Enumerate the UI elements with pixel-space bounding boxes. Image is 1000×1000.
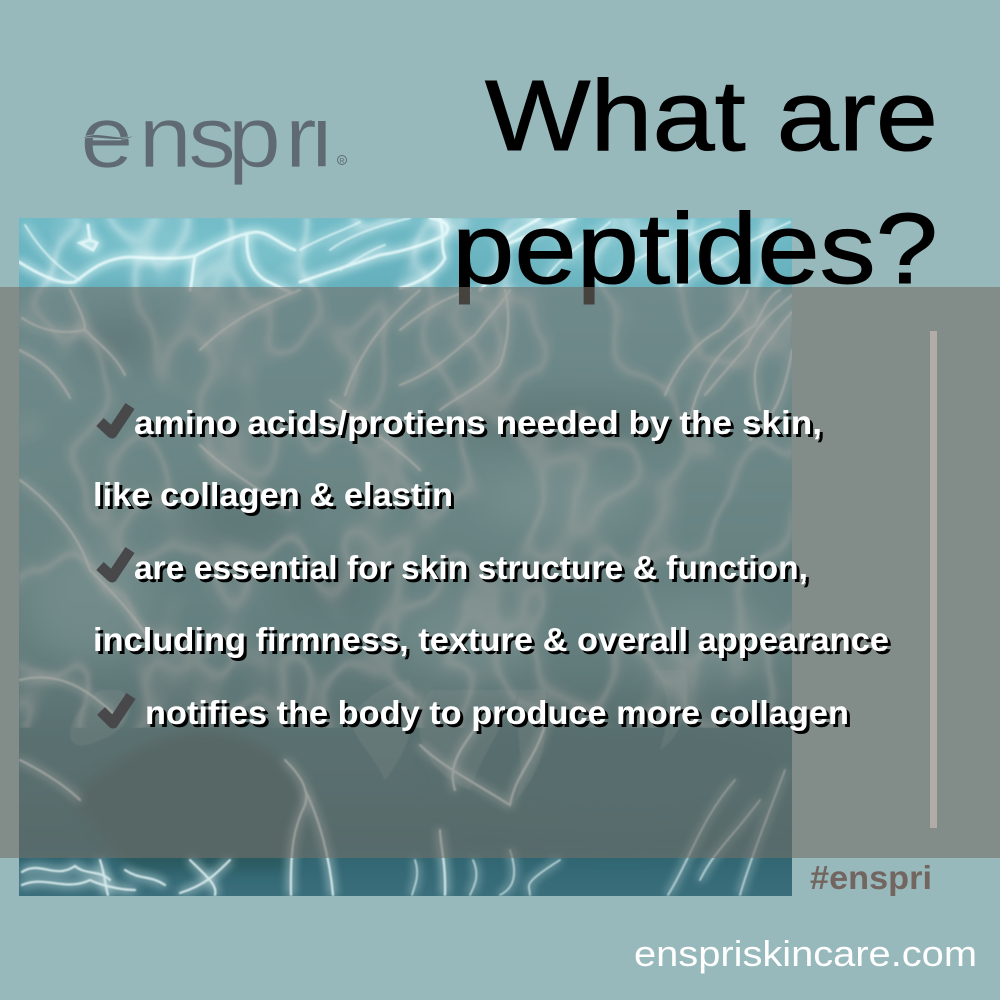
title (452, 60, 938, 305)
bullet 2 line 2: including firmness, texture & overall appearance (93, 621, 889, 658)
icon: check mark 3 (101, 696, 131, 723)
bullet 3: notifies the body to produce more collagen (145, 694, 849, 731)
panel: grey overlay band (0, 287, 1000, 858)
logo: enspri: R (339, 158, 344, 165)
hashtag: #enspri (810, 859, 932, 896)
logo: enspri: enspri (80, 89, 333, 186)
icon: check mark 1 (100, 406, 130, 433)
vertical divider bar (930, 331, 937, 828)
icon: check mark 2 (100, 550, 130, 577)
title line: What are: What are (485, 60, 938, 172)
bullet 1 line 1: amino acids/protiens needed by the skin, (134, 404, 822, 441)
title line: peptides?: peptides? (452, 193, 938, 305)
bullet list (93, 404, 889, 731)
bullet 1 line 2: like collagen & elastin (93, 476, 453, 513)
website: enspriskincare.com (634, 933, 977, 974)
bullet 2 line 1: are essential for skin structure & function, (134, 549, 808, 586)
panel: water photo (19, 218, 792, 896)
